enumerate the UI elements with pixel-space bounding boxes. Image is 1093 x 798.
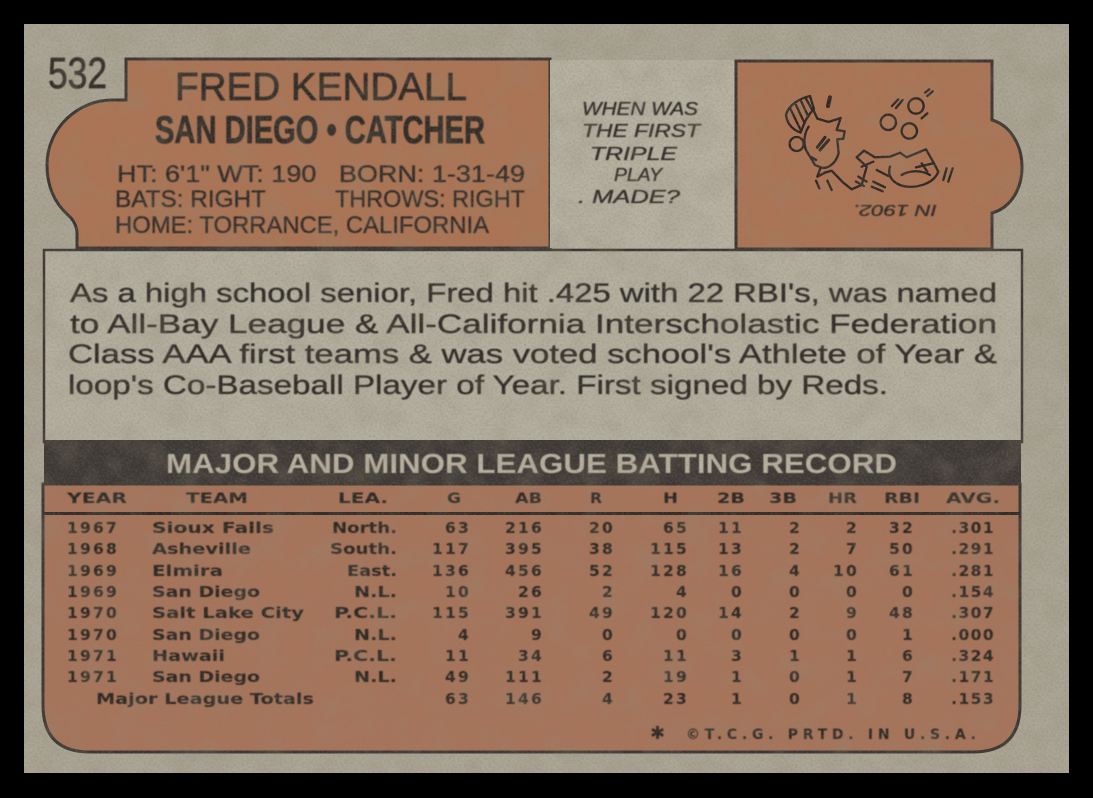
table column headers: YEAR xyxy=(66,491,127,507)
hits column: 65 xyxy=(663,519,689,537)
doubles column: 0 xyxy=(731,626,744,644)
team column: Asheville xyxy=(152,540,251,558)
panel: batting record xyxy=(43,440,1021,752)
home runs column: 2 xyxy=(846,519,859,537)
hits column: 11 xyxy=(663,647,689,665)
triples column: 2 xyxy=(789,604,802,622)
hits column: 23 xyxy=(663,690,689,708)
triples column: 0 xyxy=(789,668,802,686)
hometown: HOME: TORRANCE, CALIFORNIA xyxy=(115,212,489,239)
league column: South. xyxy=(330,540,397,558)
games column: 63 xyxy=(445,690,471,708)
runs batted in column: 32 xyxy=(889,519,915,537)
table column headers: 3B xyxy=(769,491,797,507)
runs batted in column: 50 xyxy=(889,540,915,558)
home runs column: 1 xyxy=(846,690,859,708)
games column: 11 xyxy=(445,647,471,665)
table column headers: H xyxy=(663,491,678,507)
league column: P.C.L. xyxy=(334,647,397,665)
panel: biography xyxy=(44,250,1022,442)
batting average column: .301 xyxy=(951,519,995,537)
games column: 4 xyxy=(458,626,471,644)
runs column: 49 xyxy=(589,604,615,622)
biography text: loop's Co-Baseball Player of Year. First signed by Reds. xyxy=(68,370,888,400)
league column: North. xyxy=(332,519,397,537)
biography text: Class AAA first teams & was voted school's Athlete of Year & xyxy=(68,339,997,369)
home runs column: 9 xyxy=(846,604,859,622)
table column headers: AVG. xyxy=(946,491,1000,507)
doubles column: 14 xyxy=(718,604,744,622)
team column: Major League Totals xyxy=(96,690,314,708)
question text xyxy=(578,99,703,207)
league column: N.L. xyxy=(354,668,397,686)
biography text: to All-Bay League & All-California Interscholastic Federation xyxy=(70,309,997,339)
runs batted in column: 1 xyxy=(902,626,915,644)
runs batted in column: 61 xyxy=(889,562,915,580)
runs column: 2 xyxy=(602,583,615,601)
triples column: 1 xyxy=(789,647,802,665)
runs column: 20 xyxy=(589,519,615,537)
league column: N.L. xyxy=(354,626,397,644)
batting average column: .324 xyxy=(951,647,995,665)
panel: trivia question xyxy=(550,60,736,248)
triples column xyxy=(789,519,802,708)
doubles column: 1 xyxy=(731,668,744,686)
team column: Elmira xyxy=(152,562,223,580)
panel: cartoon answer xyxy=(736,61,1022,249)
printer's credit line xyxy=(650,723,976,744)
at bats column: 216 xyxy=(505,519,544,537)
at bats column: 146 xyxy=(505,690,544,708)
runs column: 52 xyxy=(589,562,615,580)
throwing side: THROWS: RIGHT xyxy=(335,186,525,213)
title banner xyxy=(44,440,1021,485)
hits column: 128 xyxy=(650,562,689,580)
runs batted in column: 8 xyxy=(902,690,915,708)
table column headers xyxy=(66,491,1000,507)
at bats column: 111 xyxy=(505,668,544,686)
player name: FRED KENDALL xyxy=(175,66,467,109)
hits column xyxy=(650,519,689,708)
year column xyxy=(67,519,119,686)
hits column: 4 xyxy=(676,583,689,601)
year column: 1967 xyxy=(67,519,119,537)
home runs column: 10 xyxy=(833,562,859,580)
doubles column: 16 xyxy=(718,562,744,580)
doubles column: 0 xyxy=(731,583,744,601)
league column xyxy=(330,519,397,686)
year column: 1969 xyxy=(67,583,119,601)
games column: 63 xyxy=(445,519,471,537)
card number: 532 xyxy=(48,49,107,98)
printer's credit line: ✱ xyxy=(650,723,665,744)
team column: San Diego xyxy=(152,668,260,686)
height, weight and birth date: HT: 6'1" WT: 190 BORN: 1-31-49 xyxy=(117,161,525,188)
doubles column: 11 xyxy=(718,519,744,537)
table column headers: HR xyxy=(828,491,857,507)
doubles column xyxy=(718,519,744,708)
batting side: BATS: RIGHT xyxy=(115,186,266,213)
year column: 1970 xyxy=(67,626,119,644)
home runs column: 0 xyxy=(846,626,859,644)
team and position: SAN DIEGO • CATCHER xyxy=(155,109,485,152)
triples column: 4 xyxy=(789,562,802,580)
at bats column: 395 xyxy=(505,540,544,558)
at bats column: 9 xyxy=(531,626,544,644)
team column: Sioux Falls xyxy=(152,519,274,537)
team column: Salt Lake City xyxy=(152,604,304,622)
team column: San Diego xyxy=(152,583,260,601)
biography text: As a high school senior, Fred hit .425 with 22 RBI's, was named xyxy=(70,278,997,308)
year column: 1971 xyxy=(67,647,119,665)
runs column: 38 xyxy=(589,540,615,558)
question text: TRIPLE xyxy=(590,144,678,164)
at bats column: 456 xyxy=(505,562,544,580)
league column: N.L. xyxy=(354,583,397,601)
triples column: 0 xyxy=(789,690,802,708)
runs batted in column: 48 xyxy=(889,604,915,622)
batting average column xyxy=(951,519,995,708)
table column headers: LEA. xyxy=(338,491,388,507)
hits column: 0 xyxy=(676,626,689,644)
batting average column: .307 xyxy=(951,604,995,622)
team column: San Diego xyxy=(152,626,260,644)
batting average column: .000 xyxy=(951,626,995,644)
home runs column xyxy=(833,519,859,708)
triples column: 0 xyxy=(789,583,802,601)
table column headers: R xyxy=(590,491,602,507)
games column: 115 xyxy=(432,604,471,622)
table column headers: 2B xyxy=(717,491,745,507)
runs column: 6 xyxy=(602,647,615,665)
question text: . MADE? xyxy=(578,187,680,207)
hits column: 115 xyxy=(650,540,689,558)
games column: 49 xyxy=(445,668,471,686)
games column: 10 xyxy=(445,583,471,601)
runs column: 4 xyxy=(602,690,615,708)
runs column: 0 xyxy=(602,626,615,644)
triples column: 2 xyxy=(789,540,802,558)
icon: cartoon of fielder with three baseballs xyxy=(786,89,953,191)
team column: Hawaii xyxy=(152,647,225,665)
doubles column: 1 xyxy=(731,690,744,708)
year column: 1968 xyxy=(67,540,119,558)
triples column: 0 xyxy=(789,626,802,644)
at bats column: 34 xyxy=(518,647,544,665)
printer's credit line: ©T.C.G. PRTD. IN U.S.A. xyxy=(686,727,976,743)
table column headers: TEAM xyxy=(186,491,248,507)
runs column xyxy=(589,519,615,708)
league column: East. xyxy=(347,562,397,580)
question text: PLAY xyxy=(614,165,664,185)
year column: 1971 xyxy=(67,668,119,686)
batting average column: .291 xyxy=(951,540,995,558)
runs column: 2 xyxy=(602,668,615,686)
batting average column: .171 xyxy=(951,668,995,686)
games column: 117 xyxy=(432,540,471,558)
at bats column xyxy=(505,519,544,708)
at bats column: 26 xyxy=(518,583,544,601)
home runs column: 7 xyxy=(846,540,859,558)
table column headers: G xyxy=(447,491,461,507)
doubles column: 3 xyxy=(731,647,744,665)
games column: 136 xyxy=(432,562,471,580)
home runs column: 0 xyxy=(846,583,859,601)
biography text xyxy=(68,278,997,400)
year column: 1969 xyxy=(67,562,119,580)
question text: THE FIRST xyxy=(582,121,703,141)
title banner: MAJOR AND MINOR LEAGUE BATTING RECORD xyxy=(166,448,897,479)
hits column: 120 xyxy=(650,604,689,622)
home runs column: 1 xyxy=(846,647,859,665)
table column headers: RBI xyxy=(884,491,920,507)
panel: name and bio panel xyxy=(47,49,550,248)
runs batted in column xyxy=(889,519,915,708)
upside-down trivia answer: IN 1902. xyxy=(853,201,937,218)
home runs column: 1 xyxy=(846,668,859,686)
triples column: 2 xyxy=(789,519,802,537)
games column xyxy=(432,519,471,708)
team column xyxy=(96,519,314,708)
runs batted in column: 6 xyxy=(902,647,915,665)
batting average column: .153 xyxy=(951,690,995,708)
runs batted in column: 0 xyxy=(902,583,915,601)
hits column: 19 xyxy=(663,668,689,686)
batting average column: .281 xyxy=(951,562,995,580)
year column: 1970 xyxy=(67,604,119,622)
runs batted in column: 7 xyxy=(902,668,915,686)
at bats column: 391 xyxy=(505,604,544,622)
league column: P.C.L. xyxy=(334,604,397,622)
batting average column: .154 xyxy=(951,583,995,601)
question text: WHEN WAS xyxy=(582,99,698,119)
table column headers: AB xyxy=(515,491,542,507)
doubles column: 13 xyxy=(718,540,744,558)
